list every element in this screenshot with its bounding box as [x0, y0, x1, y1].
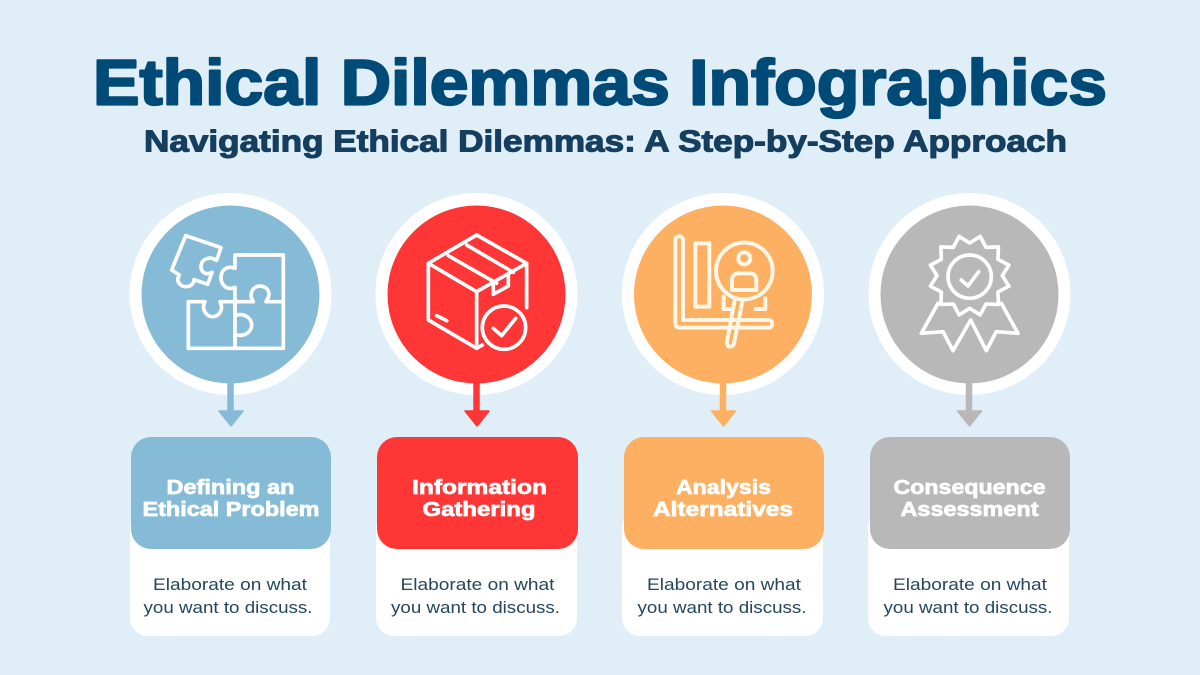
body text: Elaborate on what — [153, 576, 307, 594]
heading card — [131, 437, 331, 549]
arrow — [712, 383, 736, 426]
panel: information gathering — [376, 193, 578, 636]
body text: you want to discuss. — [391, 599, 560, 617]
panel: consequence assessment — [868, 193, 1070, 636]
heading card: Information — [412, 477, 547, 499]
icon: package with check — [428, 235, 527, 349]
heading card: Analysis — [676, 477, 771, 499]
heading card: Gathering — [422, 499, 536, 521]
arrow — [219, 383, 243, 426]
title: Ethical Dilemmas Infographics — [93, 46, 1107, 118]
icon: chart with magnifier — [675, 236, 773, 347]
heading card — [377, 437, 578, 549]
body text: you want to discuss. — [884, 599, 1052, 617]
heading card: Defining an — [166, 477, 294, 499]
heading card — [870, 437, 1070, 549]
icon: award rosette — [921, 236, 1018, 351]
body text: Elaborate on what — [400, 576, 555, 594]
body text: Elaborate on what — [893, 576, 1047, 594]
arrow — [958, 383, 982, 426]
heading card: Consequence — [894, 477, 1046, 499]
circle badge: box — [376, 193, 578, 395]
description card — [130, 510, 330, 636]
panel: defining an ethical problem — [130, 193, 332, 636]
arrow — [465, 383, 489, 426]
heading card: Assessment — [900, 499, 1039, 521]
icon: puzzle pieces — [172, 236, 283, 348]
circle badge: puzzle — [130, 193, 332, 395]
description card — [622, 510, 823, 636]
panel: analysis alternatives — [622, 193, 824, 636]
body text: you want to discuss. — [638, 599, 806, 617]
subtitle: Navigating Ethical Dilemmas: A Step-by-Step Approach — [144, 125, 1067, 159]
circle badge: analysis — [622, 193, 824, 395]
body text: you want to discuss. — [144, 599, 312, 617]
heading card: Ethical Problem — [142, 499, 320, 521]
description card — [376, 510, 577, 636]
circle badge: award — [868, 193, 1070, 395]
heading card: Alternatives — [653, 499, 793, 521]
description card — [868, 510, 1069, 636]
heading card — [624, 437, 824, 549]
body text: Elaborate on what — [647, 576, 801, 594]
